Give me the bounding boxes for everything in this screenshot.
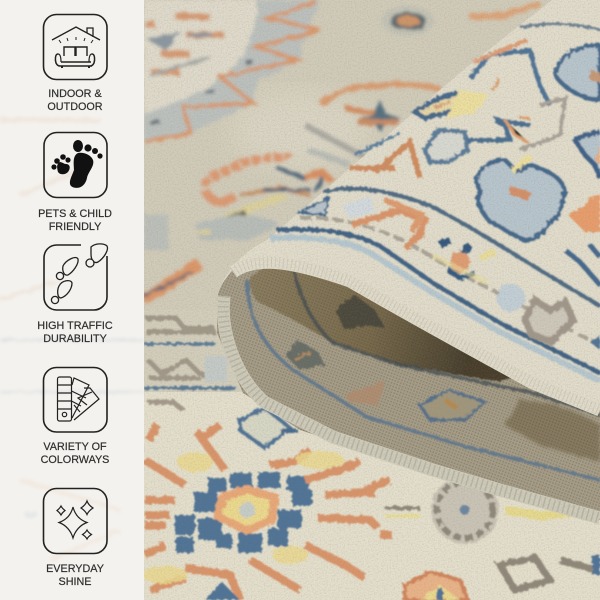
label: EVERYDAY (46, 563, 104, 575)
feature: variety of colorways: COLORWAYS (41, 454, 109, 466)
rug lower gray flower (385, 476, 600, 600)
feature: high traffic durability: DURABILITY (43, 333, 107, 345)
rug weave texture (144, 0, 600, 600)
feature: everyday shine: SHINE (58, 576, 92, 588)
feature: everyday shine (44, 488, 107, 588)
rolled rug top face (217, 0, 600, 405)
rug floor background (143, 0, 600, 600)
feature: indoor and outdoor: OUTDOOR (47, 101, 103, 113)
roll floral motifs (300, 40, 600, 350)
feature: variety of colorways (41, 368, 109, 466)
icon: paw and foot prints (44, 132, 107, 198)
backing motifs (285, 295, 485, 420)
icon: color swatch fan (44, 368, 107, 432)
label: VARIETY OF (43, 441, 107, 453)
feature: high traffic durability (37, 244, 113, 345)
rug border band with gray motifs (144, 318, 236, 410)
icon: footprints (44, 244, 107, 310)
label: PETS & CHILD (38, 208, 112, 220)
rug top-left medallion and zigzag (144, 0, 320, 142)
rug lower large flower (143, 408, 392, 600)
label: INDOOR & (48, 88, 102, 100)
rolled rug fringe edges (223, 262, 600, 518)
icon: house with sofa (44, 14, 107, 80)
rolled rug underside backing (217, 258, 600, 520)
rug top-right flower motif (382, 3, 540, 36)
roll border stripes (270, 24, 600, 381)
feature: pets and child friendly: FRIENDLY (49, 221, 101, 233)
icon: sparkles (44, 488, 107, 554)
feature: pets and child friendly (38, 132, 112, 233)
label: HIGH TRAFFIC (37, 320, 113, 332)
rug orange floral motifs behind the roll (144, 84, 440, 300)
left white panel (0, 0, 144, 600)
feature: indoor and outdoor (44, 14, 107, 113)
